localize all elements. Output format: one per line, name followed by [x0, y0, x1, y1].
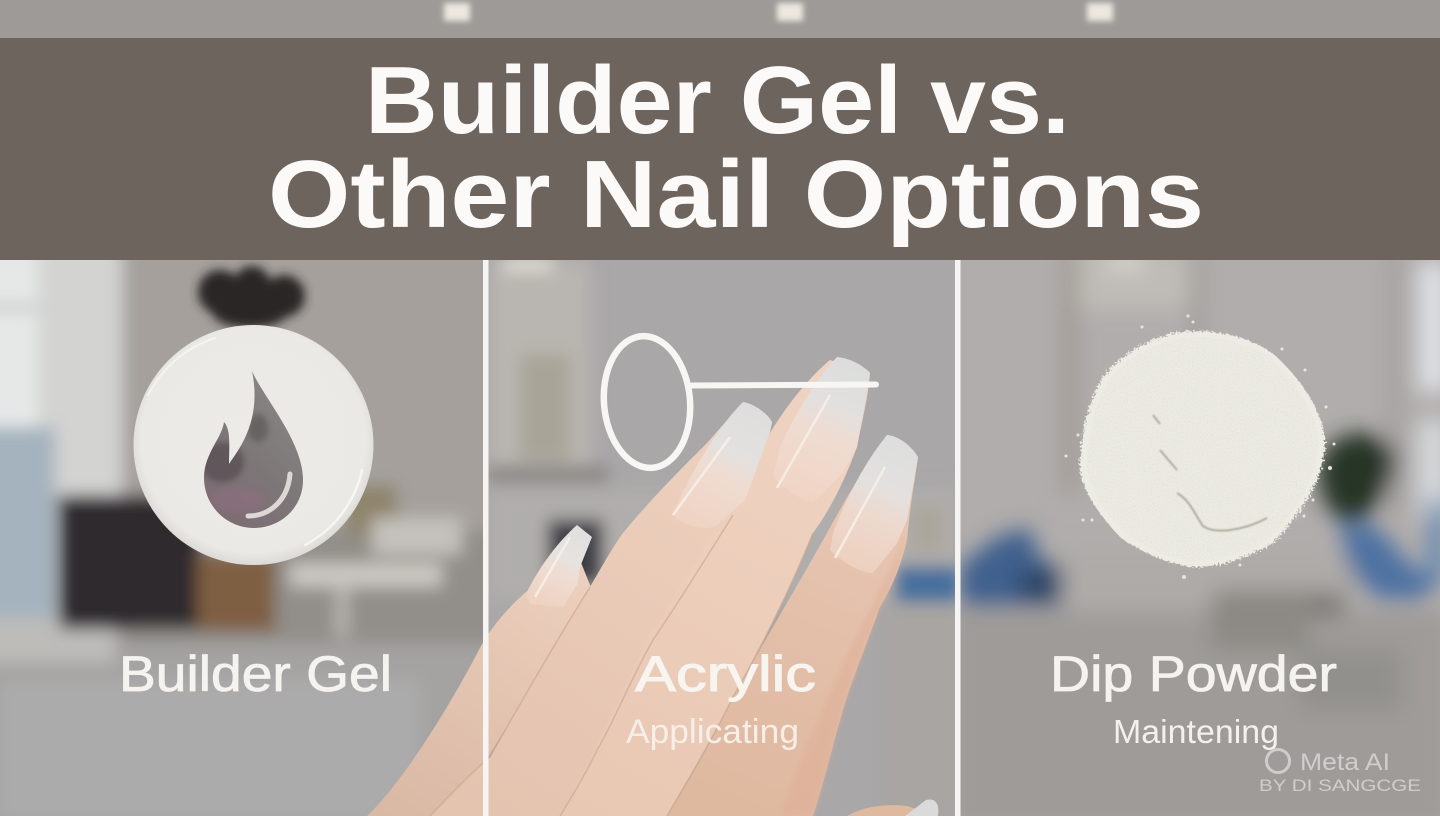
- label: dip powder: Dip Powder: [1050, 646, 1337, 702]
- nail: ring: [672, 402, 772, 528]
- nail: thumb tip: [847, 800, 938, 816]
- panel: dip powder background: [950, 250, 1440, 816]
- finger: index: [667, 435, 918, 816]
- finger side blush: [780, 530, 907, 816]
- finger: middle: [560, 360, 870, 816]
- divider: left: [483, 260, 488, 816]
- icon: flame drop: [200, 371, 303, 528]
- watermark: BY DI SANGCGE: [1259, 776, 1421, 795]
- icon: white loop applicator tool: [598, 333, 876, 471]
- panel: builder gel background: [0, 260, 483, 666]
- title: [268, 47, 1204, 248]
- finger shading lines: [430, 515, 813, 816]
- nail: index: [830, 435, 918, 573]
- label: maintening: Maintening: [1113, 713, 1279, 750]
- label: builder gel: Builder Gel: [119, 646, 392, 702]
- illustration: hand with acrylic nails: [367, 357, 938, 816]
- nail highlights: [535, 395, 885, 597]
- nail: pinky: [526, 525, 592, 607]
- icon: builder gel disc with flame drop: [134, 325, 374, 565]
- watermark: Meta AI: [1300, 749, 1390, 776]
- title: Builder Gel vs.: [365, 47, 1070, 154]
- title: Other Nail Options: [268, 141, 1204, 248]
- label: applicating: Applicating: [626, 713, 799, 751]
- panel: acrylic background: [488, 260, 955, 611]
- finger: ring: [430, 402, 772, 816]
- icon: dip powder pile: [1064, 314, 1336, 579]
- label: acrylic: Acrylic: [635, 646, 816, 702]
- top ceiling strip: [0, 0, 1440, 40]
- finger: pinky: [367, 560, 592, 816]
- nail: middle: [773, 357, 870, 502]
- watermark: [1259, 749, 1421, 795]
- plant: [198, 266, 305, 328]
- title band: [0, 38, 1440, 260]
